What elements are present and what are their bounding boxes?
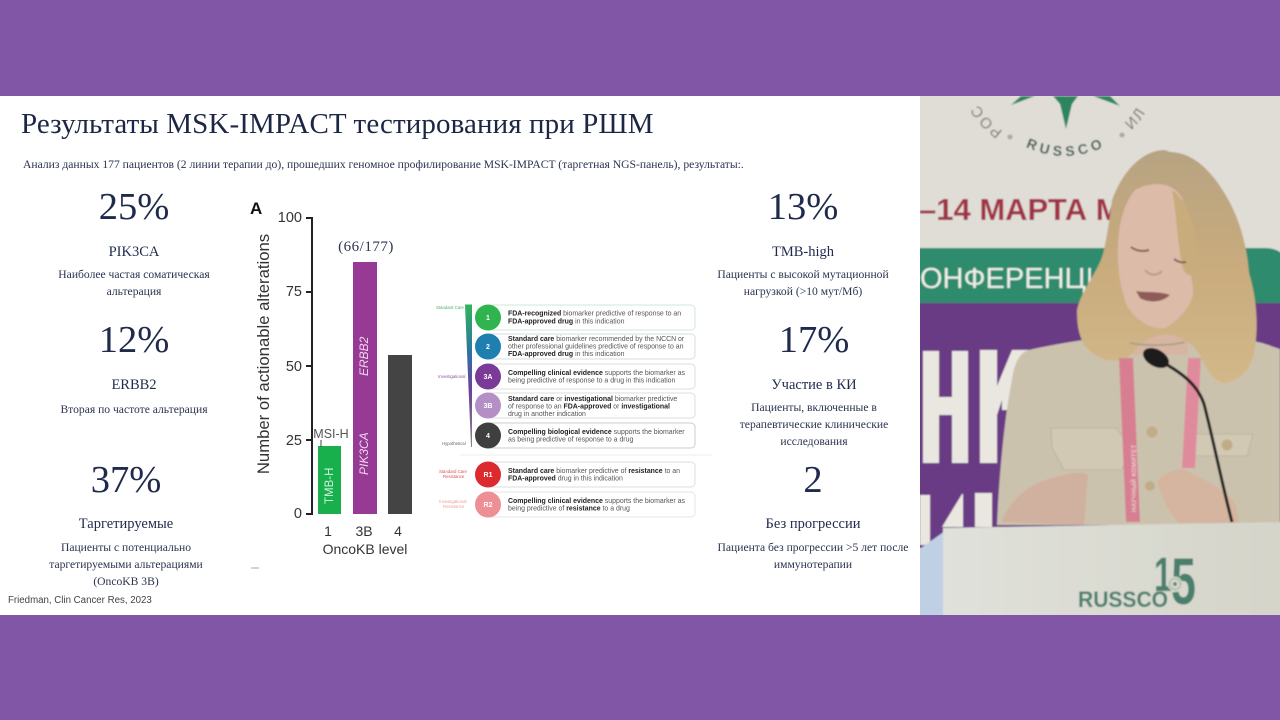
- stat: 2 without progression: иммунотерапии: [774, 558, 852, 571]
- bar chart: actionable alterations by OncoKB level: A: [250, 199, 262, 218]
- microphone: [1162, 362, 1232, 522]
- OncoKB levels legend: R1: [484, 472, 493, 479]
- bar chart: actionable alterations by OncoKB level: PIK3CA: [357, 432, 371, 475]
- stat: 2 without progression: [718, 459, 908, 571]
- backdrop logo star: [1011, 96, 1120, 129]
- OncoKB levels legend: drug in another indication: [508, 411, 586, 418]
- OncoKB levels legend: being predictive of response to a drug in this indication: [508, 378, 676, 384]
- OncoKB levels legend: Standard care biomarker predictive of resistance to an: [508, 468, 680, 475]
- bar chart: actionable alterations by OncoKB level: 1: [324, 523, 332, 539]
- lectern: [915, 531, 945, 620]
- bar chart: actionable alterations by OncoKB level: (66/177): [338, 239, 394, 255]
- stat: 13% TMB-high: 13%: [768, 186, 838, 228]
- stat: 37% targetable: Пациенты с потенциально: [61, 541, 191, 554]
- bar chart: actionable alterations by OncoKB level: MSI-H: [313, 427, 349, 441]
- OncoKB levels legend: Standard Care: [436, 305, 465, 310]
- speaker video panel: [920, 96, 1280, 615]
- stat: 17% clinical trials: терапевтические клинические: [740, 418, 888, 431]
- presenter: [997, 333, 1280, 525]
- OncoKB levels legend: Investigational: [438, 374, 466, 379]
- date text: –14 МАРТА М: [920, 192, 1122, 227]
- stat: 13% TMB-high: [717, 186, 889, 298]
- OncoKB levels legend: Compelling clinical evidence supports the biomarker as: [508, 370, 686, 377]
- OncoKB levels legend: 3A: [484, 374, 492, 381]
- RUSSCO arc text: RUSSCO: [1026, 138, 1102, 157]
- OncoKB levels legend: R2: [484, 502, 493, 509]
- bar chart: actionable alterations by OncoKB level: ERBB2: [357, 336, 371, 376]
- bar chart: actionable alterations by OncoKB level: 100: [278, 210, 302, 226]
- subtitle text: Анализ данных 177 пациентов (2 линии терапии до), прошедших геномное профилирование MSK-IMPACT (таргетная NGS-панель), результаты:.: [23, 158, 744, 171]
- banner text: ОНФЕРЕНЦИ: [920, 263, 1107, 295]
- OncoKB levels legend: FDA-approved drug in this indication: [508, 351, 625, 358]
- stat: 37% targetable: 37%: [91, 459, 161, 501]
- bar chart: actionable alterations by OncoKB level: 4: [394, 523, 402, 539]
- OncoKB levels legend: FDA-approved drug in this indication: [508, 318, 625, 326]
- bar chart: actionable alterations by OncoKB level: TMB-H: [324, 468, 336, 504]
- jacket pockets: [1051, 428, 1253, 470]
- OncoKB levels legend: Hypothetical: [442, 441, 466, 446]
- title: Результаты MSK-IMPACT тестирования при РШМ: [21, 108, 654, 140]
- stat: 12% ERBB2: 12%: [99, 319, 169, 361]
- backdrop: НАУЧНЫЙ КОМИТЕТ: [1130, 444, 1138, 512]
- bar chart: actionable alterations by OncoKB level: 50: [286, 359, 302, 375]
- OncoKB levels legend: Standard care or investigational biomarker predictive: [508, 396, 677, 403]
- OncoKB levels legend: FDA-recognized biomarker predictive of response to an: [508, 310, 681, 318]
- stat: 2 without progression: 2: [803, 459, 823, 501]
- stat: 17% clinical trials: Участие в КИ: [771, 377, 857, 393]
- OncoKB levels legend: Compelling biological evidence supports the biomarker: [508, 429, 685, 436]
- stat: 37% targetable: (OncoKB 3B): [93, 575, 159, 588]
- stat: 2 without progression: Пациента без прогрессии >5 лет после: [718, 541, 908, 554]
- citation: Friedman, Clin Cancer Res, 2023: [8, 595, 152, 606]
- stat: 13% TMB-high: Пациенты с высокой мутационной: [717, 268, 889, 281]
- stat: 12% ERBB2: ERBB2: [111, 377, 157, 393]
- bar chart: actionable alterations by OncoKB level: [250, 199, 412, 568]
- lanyard: [1119, 358, 1140, 522]
- backdrop: ИЛ: [1124, 108, 1146, 130]
- stat: 25% PIK3CA: [58, 186, 210, 298]
- OncoKB levels legend: Compelling clinical evidence supports the biomarker as: [508, 498, 686, 505]
- OncoKB levels legend: Standard care biomarker recommended by the NCCN or: [508, 336, 685, 343]
- bar chart: actionable alterations by OncoKB level: OncoKB level: [323, 541, 407, 557]
- OncoKB levels legend: other professional guidelines predictive of response to an: [508, 344, 684, 350]
- backdrop: [920, 96, 1280, 615]
- stat: 17% clinical trials: 17%: [779, 319, 849, 361]
- OncoKB levels legend: FDA-approved drug in this indication: [508, 476, 623, 482]
- OncoKB levels legend: Resistance: [443, 504, 465, 509]
- OncoKB levels legend: Investigational: [439, 499, 467, 504]
- stat: 13% TMB-high: TMB-high: [772, 244, 834, 260]
- lectern logo: 1: [1154, 549, 1172, 602]
- OncoKB levels legend: [436, 304, 712, 518]
- stat: 25% PIK3CA: PIK3CA: [109, 244, 159, 260]
- stat: 25% PIK3CA: 25%: [99, 186, 169, 228]
- stat: 37% targetable: таргетируемыми альтерациями: [49, 558, 203, 571]
- backdrop: РОС: [970, 106, 1002, 139]
- OncoKB levels legend: Resistance: [443, 474, 465, 479]
- bar chart: actionable alterations by OncoKB level: 75: [286, 284, 302, 300]
- stat: 25% PIK3CA: альтерация: [107, 285, 161, 298]
- OncoKB levels legend: Standard Care: [439, 469, 468, 474]
- bar chart: actionable alterations by OncoKB level: Number of actionable alterations: [254, 234, 273, 474]
- stat: 17% clinical trials: Пациенты, включенные в: [751, 401, 877, 414]
- stat: 25% PIK3CA: Наиболее частая соматическая: [58, 268, 210, 281]
- bar chart: actionable alterations by OncoKB level: 3B: [355, 523, 373, 539]
- stat: 17% clinical trials: исследования: [780, 435, 848, 448]
- OncoKB levels legend: of response to an FDA-approved or investigational: [508, 404, 670, 410]
- OncoKB levels legend: 4: [486, 433, 490, 440]
- stat: 12% ERBB2: Вторая по частоте альтерация: [60, 403, 208, 416]
- stat: 37% targetable: [49, 459, 203, 588]
- backdrop big letters: [920, 350, 1032, 545]
- stat: 37% targetable: Таргетируемые: [79, 516, 173, 532]
- OncoKB levels legend: 1: [486, 315, 490, 322]
- slide panel: [0, 96, 920, 615]
- OncoKB levels legend: 2: [486, 344, 490, 351]
- bar chart: actionable alterations by OncoKB level: 25: [286, 433, 302, 449]
- stat: 2 without progression: Без прогрессии: [766, 516, 860, 532]
- stat: 13% TMB-high: нагрузкой (>10 мут/Мб): [744, 285, 862, 298]
- stat: 17% clinical trials: [740, 319, 888, 448]
- OncoKB levels legend: 3B: [484, 403, 492, 410]
- bar chart: actionable alterations by OncoKB level: 0: [294, 506, 302, 522]
- OncoKB levels legend: as being predictive of response to a drug: [508, 436, 633, 444]
- stat: 12% ERBB2: [60, 319, 208, 416]
- backdrop: RUSSCO: [1078, 587, 1168, 612]
- hands: [1002, 473, 1088, 525]
- OncoKB levels legend: being predictive of resistance to a drug: [508, 506, 630, 512]
